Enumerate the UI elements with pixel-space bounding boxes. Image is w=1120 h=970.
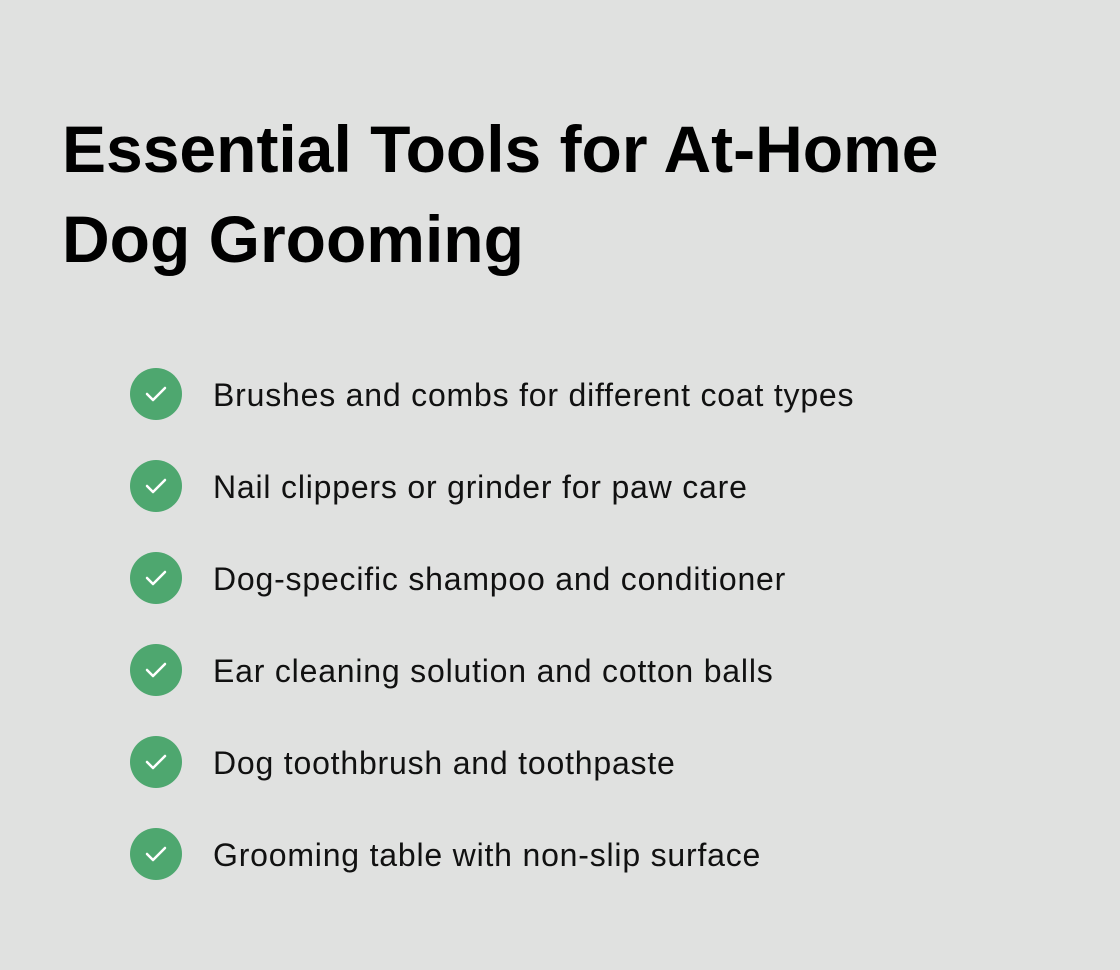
icon: check bbox=[130, 460, 182, 512]
icon: check bbox=[130, 552, 182, 604]
list item 1: Brushes and combs for different coat types bbox=[213, 377, 854, 413]
list item 1 bbox=[130, 368, 854, 420]
icon: check bbox=[130, 736, 182, 788]
list item 5 bbox=[130, 736, 676, 788]
list item 5: Dog toothbrush and toothpaste bbox=[213, 745, 676, 781]
title: Essential Tools for At-Home bbox=[62, 112, 938, 186]
list item 6: Grooming table with non-slip surface bbox=[213, 837, 761, 873]
icon: check bbox=[130, 644, 182, 696]
list item 6 bbox=[130, 828, 761, 880]
icon: check bbox=[130, 368, 182, 420]
list item 4: Ear cleaning solution and cotton balls bbox=[213, 653, 774, 689]
title: Dog Grooming bbox=[62, 202, 524, 276]
list item 2: Nail clippers or grinder for paw care bbox=[213, 469, 748, 505]
list item 2 bbox=[130, 460, 748, 512]
icon: check bbox=[130, 828, 182, 880]
title bbox=[62, 112, 938, 276]
list item 3 bbox=[130, 552, 786, 604]
list item 3: Dog-specific shampoo and conditioner bbox=[213, 561, 786, 597]
list item 4 bbox=[130, 644, 774, 696]
